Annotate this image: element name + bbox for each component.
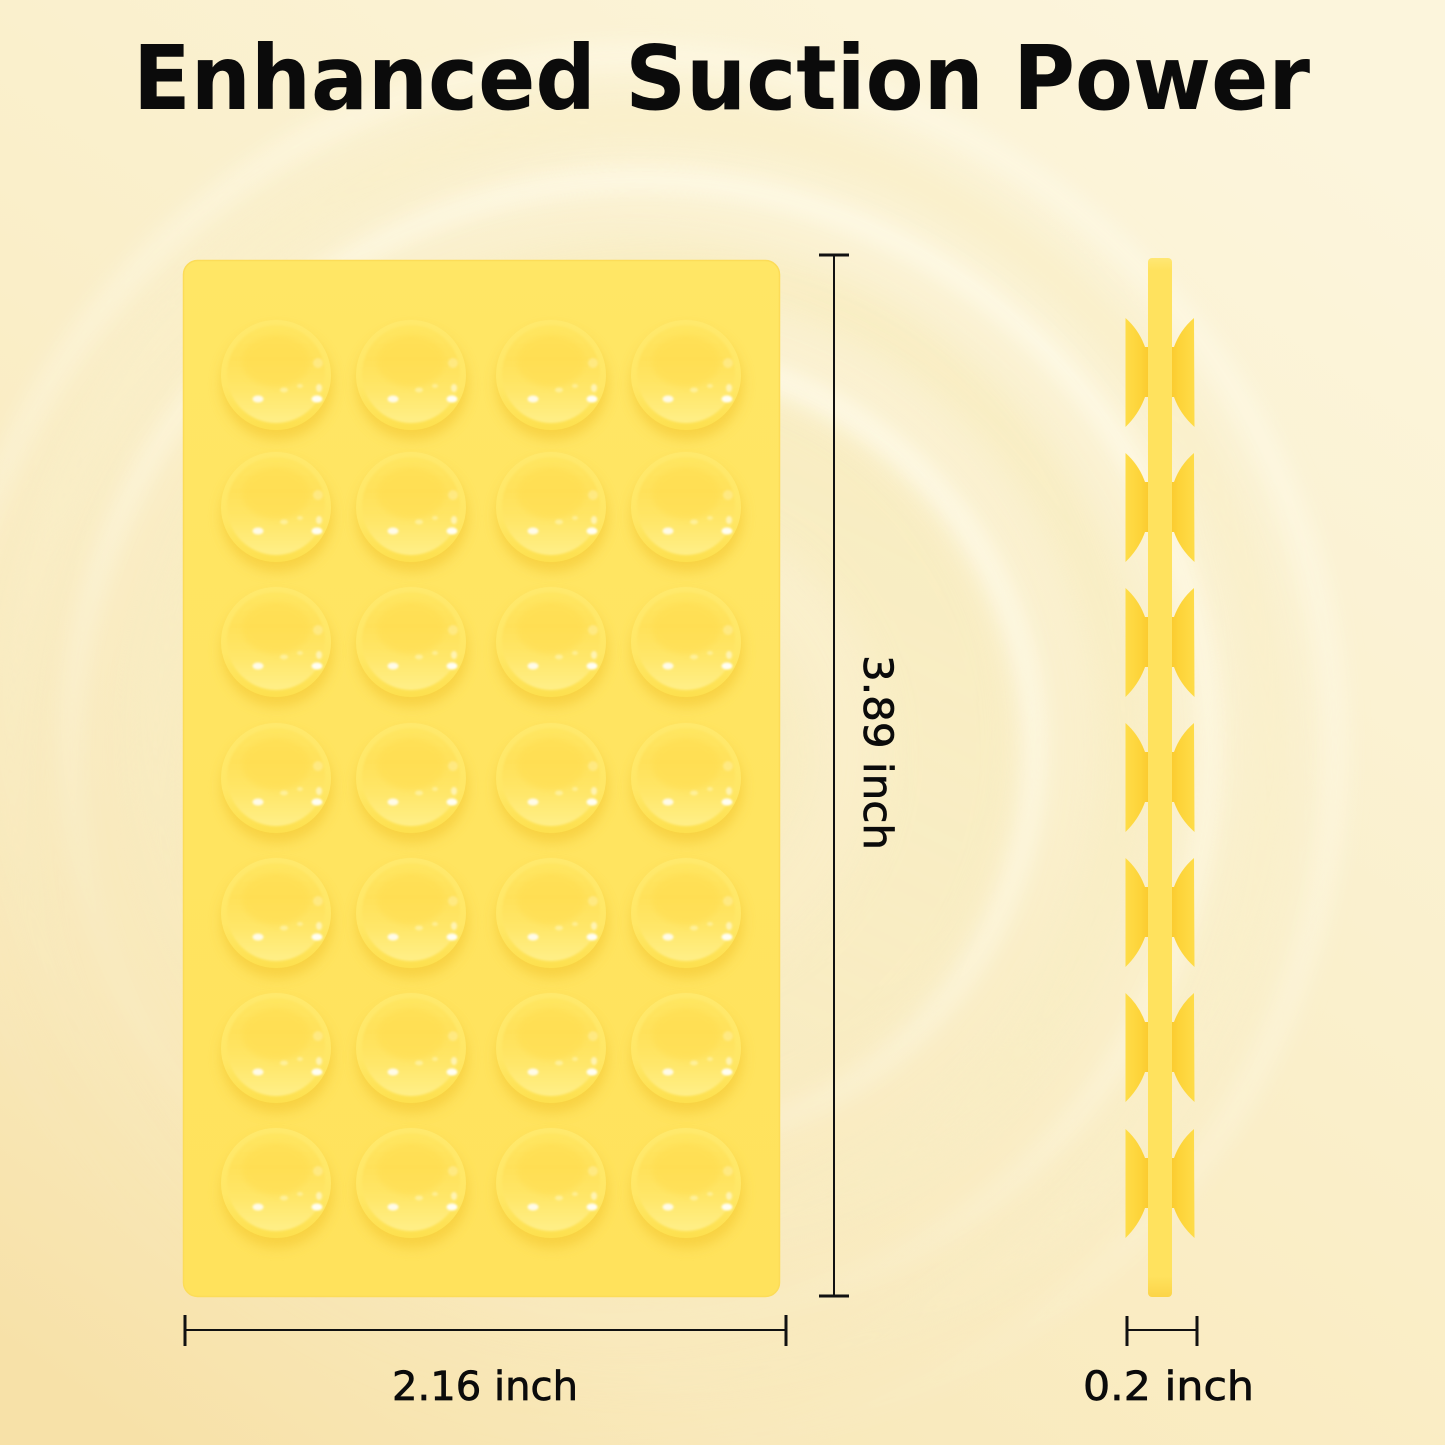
suction cups row 4 [221, 723, 743, 843]
suction cups row 6 [221, 993, 743, 1113]
thickness label: 0.2 inch [1083, 1364, 1254, 1410]
panel: front view of suction pad [184, 260, 780, 1296]
suction cups row 3 [221, 587, 743, 707]
side bar [1148, 258, 1172, 1297]
suction cups row 1 [221, 320, 743, 440]
suction cups row 7 [221, 1128, 743, 1248]
suction cups row 5 [221, 858, 743, 978]
height label: 3.89 inch [854, 655, 900, 850]
width dimension line [185, 1315, 786, 1346]
panel: side view of suction pad [1126, 258, 1194, 1297]
width label: 2.16 inch [392, 1364, 578, 1410]
suction cups row 2 [221, 452, 743, 572]
height dimension line [819, 255, 849, 1296]
pad body [184, 260, 780, 1296]
side cups [1126, 318, 1194, 1238]
title: Enhanced Suction Power [133, 26, 1310, 130]
thickness dimension line [1127, 1316, 1197, 1346]
